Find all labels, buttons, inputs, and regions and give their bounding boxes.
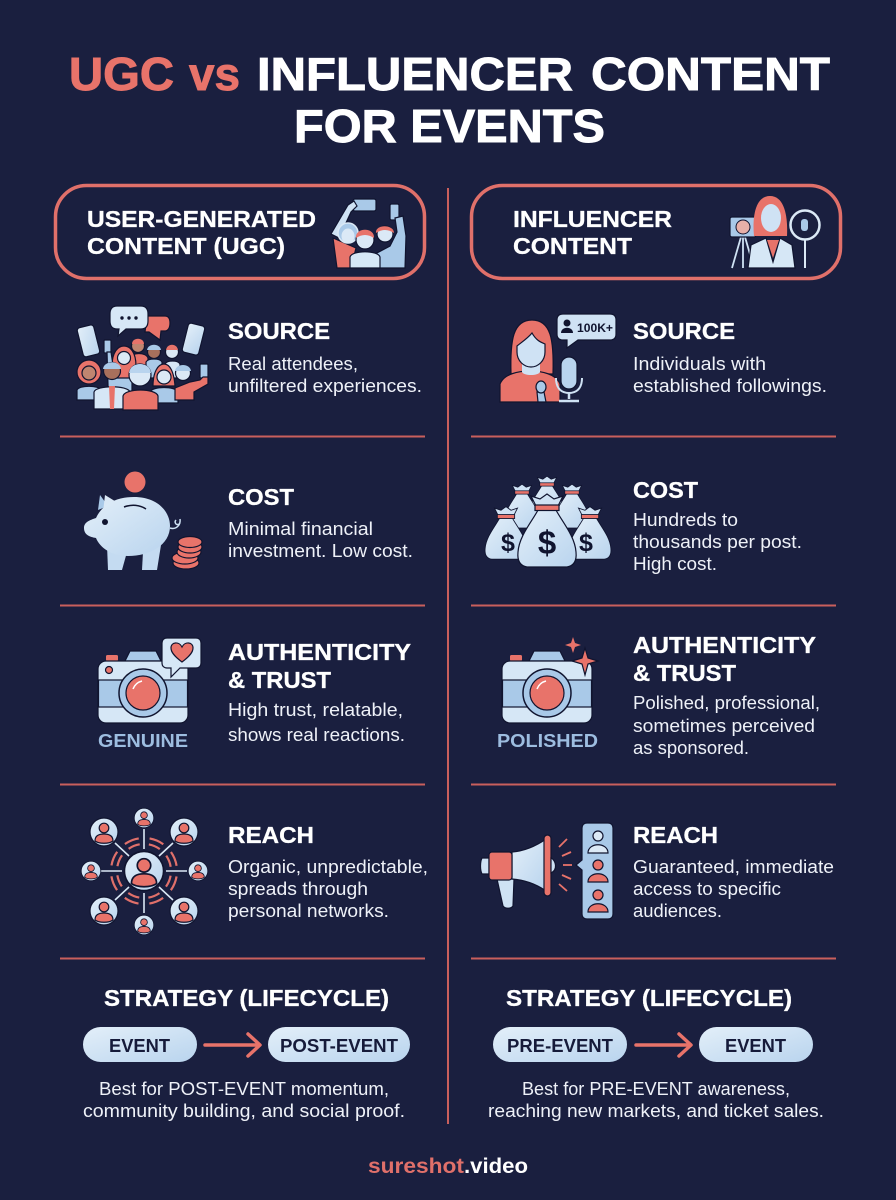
heading: authenticity and trust: AUTHENTICITY bbox=[228, 639, 411, 665]
text: source description: Real attendees, bbox=[228, 354, 358, 374]
icon: money bags: $ bbox=[501, 529, 515, 557]
text: source description: established followings. bbox=[633, 376, 827, 396]
pill: pre-event: PRE-EVENT bbox=[507, 1036, 613, 1056]
text: reach description: Guaranteed, immediate bbox=[633, 857, 834, 877]
panel: UGC cost bbox=[84, 472, 413, 570]
title: INFLUENCER bbox=[257, 48, 573, 100]
icon: selfie group bbox=[331, 199, 406, 268]
text: reach description: audiences. bbox=[633, 901, 722, 921]
heading: influencer content: CONTENT bbox=[513, 233, 632, 259]
heading: authenticity and trust: AUTHENTICITY bbox=[633, 632, 816, 658]
title bbox=[69, 48, 830, 152]
pill: event bbox=[699, 1027, 813, 1062]
heading: authenticity and trust: & TRUST bbox=[228, 667, 331, 693]
panel: UGC header bbox=[56, 186, 424, 278]
icon: piggy bank with coins bbox=[84, 472, 202, 570]
heading: authenticity and trust bbox=[633, 632, 816, 686]
pill: pre-event bbox=[493, 1027, 627, 1062]
icon: people network bbox=[81, 808, 208, 935]
heading: strategy: STRATEGY (LIFECYCLE) bbox=[104, 985, 389, 1011]
panel: influencer reach bbox=[480, 822, 834, 921]
icon: influencer with microphone: 100K+ bbox=[577, 321, 613, 335]
footer brand: sureshot bbox=[368, 1155, 464, 1178]
text: cost description bbox=[633, 510, 802, 574]
icon: money bags: $ bbox=[538, 524, 556, 561]
text: source description bbox=[633, 354, 827, 396]
icon: money bags bbox=[485, 476, 611, 567]
text: source description bbox=[228, 354, 422, 396]
icon: crowd with phones bbox=[77, 306, 208, 410]
pill: event bbox=[83, 1027, 197, 1062]
heading: user-generated content: USER-GENERATED bbox=[87, 206, 316, 232]
title: UGC bbox=[69, 48, 174, 100]
heading: reach: REACH bbox=[228, 822, 314, 848]
pill: event: EVENT bbox=[109, 1036, 170, 1056]
text: authenticity description: sometimes perceived bbox=[633, 716, 815, 736]
text: strategy description bbox=[83, 1079, 405, 1121]
icon: camera with heart bbox=[98, 638, 201, 723]
text: reach description bbox=[228, 857, 428, 921]
icon: influencer with camera and ring light bbox=[730, 196, 820, 268]
text: authenticity description: High trust, relatable, bbox=[228, 700, 403, 720]
pill: event: EVENT bbox=[725, 1036, 786, 1056]
heading: cost: COST bbox=[228, 484, 294, 510]
heading: source: SOURCE bbox=[228, 318, 330, 344]
text: source description: unfiltered experiences. bbox=[228, 376, 422, 396]
heading: influencer content bbox=[513, 206, 672, 259]
text: cost description: Hundreds to bbox=[633, 510, 738, 530]
heading: influencer content: INFLUENCER bbox=[513, 206, 672, 232]
heading: cost: COST bbox=[633, 477, 698, 503]
text: cost description: Minimal financial bbox=[228, 519, 373, 539]
text: authenticity description bbox=[633, 693, 820, 758]
text: strategy description bbox=[488, 1079, 824, 1121]
label: genuine: GENUINE bbox=[98, 731, 188, 751]
text: strategy description: community building, and social proof. bbox=[83, 1101, 405, 1121]
arrow: pre-event to event bbox=[636, 1034, 691, 1056]
text: authenticity description bbox=[228, 700, 405, 745]
text: cost description: High cost. bbox=[633, 554, 717, 574]
heading: strategy: STRATEGY (LIFECYCLE) bbox=[506, 985, 792, 1011]
text: cost description: investment. Low cost. bbox=[228, 541, 413, 561]
title: vs bbox=[189, 48, 240, 100]
heading: authenticity and trust: & TRUST bbox=[633, 660, 736, 686]
text: reach description: personal networks. bbox=[228, 901, 389, 921]
arrow: event to post-event bbox=[205, 1034, 260, 1056]
panel: UGC strategy bbox=[83, 985, 410, 1121]
text: cost description bbox=[228, 519, 413, 561]
panel: influencer source bbox=[500, 314, 827, 402]
text: strategy description: Best for POST-EVENT momentum, bbox=[99, 1079, 389, 1099]
pill: post-event bbox=[268, 1027, 410, 1062]
label: polished: POLISHED bbox=[497, 731, 598, 751]
text: authenticity description: as sponsored. bbox=[633, 738, 749, 758]
icon: influencer with microphone bbox=[500, 314, 616, 402]
heading: authenticity and trust bbox=[228, 639, 411, 693]
text: source description: Individuals with bbox=[633, 354, 766, 374]
text: authenticity description: Polished, professional, bbox=[633, 693, 820, 713]
footer brand: .video bbox=[464, 1155, 528, 1178]
text: reach description: spreads through bbox=[228, 879, 368, 899]
heading: reach: REACH bbox=[633, 822, 718, 848]
panel: UGC reach bbox=[81, 808, 428, 935]
text: strategy description: Best for PRE-EVENT awareness, bbox=[522, 1079, 790, 1099]
title: FOR EVENTS bbox=[294, 100, 605, 152]
icon: camera with sparkles bbox=[502, 637, 598, 723]
title: CONTENT bbox=[591, 48, 830, 100]
text: reach description: access to specific bbox=[633, 879, 781, 899]
panel: influencer header bbox=[472, 186, 840, 278]
text: reach description bbox=[633, 857, 834, 921]
text: strategy description: reaching new markets, and ticket sales. bbox=[488, 1101, 824, 1121]
text: cost description: thousands per post. bbox=[633, 532, 802, 552]
panel: influencer authenticity bbox=[497, 632, 820, 758]
panel: influencer strategy bbox=[488, 985, 824, 1121]
heading: user-generated content bbox=[87, 206, 316, 259]
icon: money bags: $ bbox=[579, 529, 593, 557]
panel: UGC authenticity bbox=[98, 638, 411, 751]
footer brand bbox=[368, 1155, 528, 1178]
text: reach description: Organic, unpredictable, bbox=[228, 857, 428, 877]
heading: source: SOURCE bbox=[633, 318, 735, 344]
heading: user-generated content: CONTENT (UGC) bbox=[87, 233, 285, 259]
icon: megaphone and audience bbox=[480, 823, 613, 919]
panel: influencer cost bbox=[485, 476, 802, 574]
pill: post-event: POST-EVENT bbox=[280, 1036, 398, 1056]
panel: UGC source bbox=[77, 306, 422, 410]
text: authenticity description: shows real reactions. bbox=[228, 725, 405, 745]
